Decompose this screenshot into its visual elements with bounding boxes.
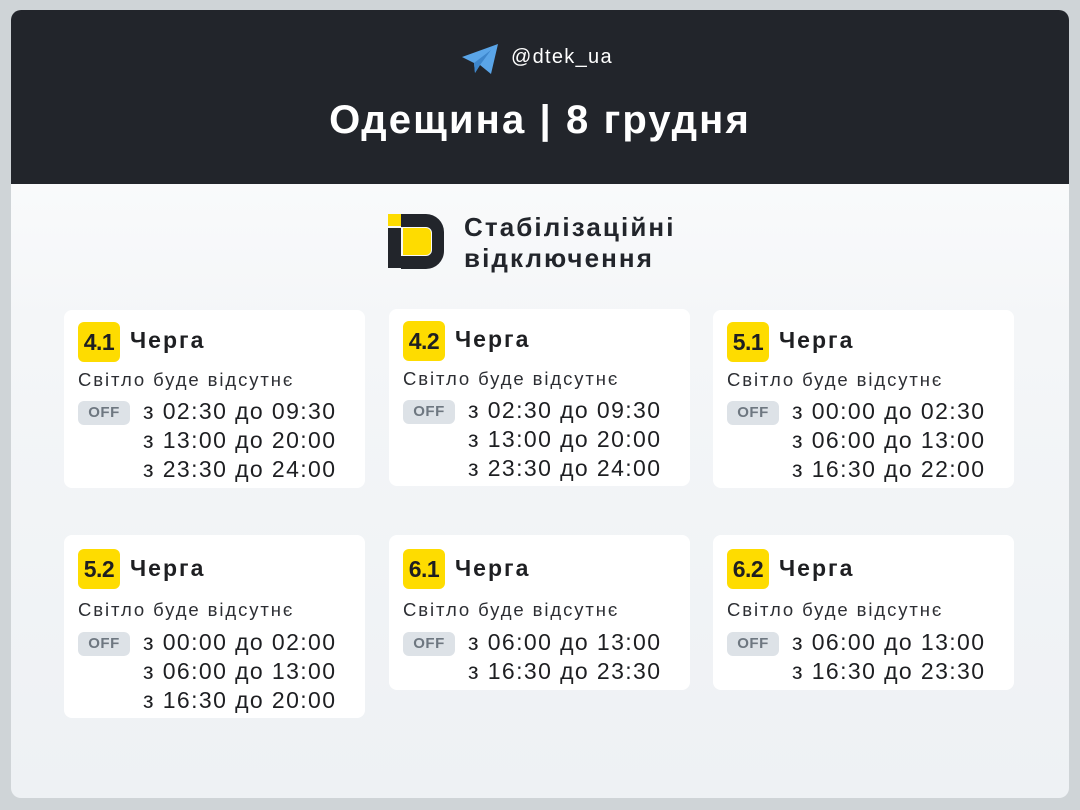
card: 6.2: OFF bbox=[737, 635, 769, 652]
card: 4.2: з 02:30 до 09:30 bbox=[468, 397, 661, 423]
card: 5.1: Світло буде відсутнє bbox=[727, 369, 943, 390]
header bbox=[11, 10, 1069, 184]
badge 6.1: 6.1 bbox=[409, 556, 439, 582]
card: 5.2: з 00:00 до 02:00 bbox=[143, 629, 336, 655]
card: 6.1: Черга bbox=[455, 555, 530, 581]
card: 5.1: з 16:30 до 22:00 bbox=[792, 456, 985, 482]
card: 5.1 bbox=[713, 310, 1014, 488]
card: 5.1: Черга bbox=[779, 327, 854, 353]
card: 6.1 bbox=[389, 535, 690, 690]
card: 4.1: Черга bbox=[130, 327, 205, 353]
telegram handle: @dtek_ua bbox=[511, 46, 613, 68]
card: 4.1: з 23:30 до 24:00 bbox=[143, 456, 336, 482]
card: 5.2: Світло буде відсутнє bbox=[78, 599, 294, 620]
logo bbox=[388, 214, 444, 269]
badge 5.1: 5.1 bbox=[733, 329, 763, 355]
badge 6.1 bbox=[403, 549, 445, 589]
badge 4.2: 4.2 bbox=[409, 328, 439, 354]
card: 6.2 bbox=[713, 535, 1014, 690]
card: 4.1: з 13:00 до 20:00 bbox=[143, 427, 336, 453]
card: 5.2: Черга bbox=[130, 555, 205, 581]
badge 4.1 bbox=[78, 322, 120, 362]
card: 5.2 bbox=[64, 535, 365, 718]
badge 4.1: 4.1 bbox=[84, 329, 114, 355]
card: 4.1: з 02:30 до 09:30 bbox=[143, 398, 336, 424]
card: 6.2: з 16:30 до 23:30 bbox=[792, 658, 985, 684]
card: 6.1: OFF bbox=[413, 635, 445, 652]
card: 5.1: з 06:00 до 13:00 bbox=[792, 427, 985, 453]
card: 4.2: Світло буде відсутнє bbox=[403, 368, 619, 389]
card: 4.2: з 23:30 до 24:00 bbox=[468, 455, 661, 481]
badge 5.2: 5.2 bbox=[84, 556, 114, 582]
card: 6.1: з 06:00 до 13:00 bbox=[468, 629, 661, 655]
card: 5.2: OFF bbox=[88, 635, 120, 652]
card: 5.1: з 00:00 до 02:30 bbox=[792, 398, 985, 424]
card: 6.2: з 06:00 до 13:00 bbox=[792, 629, 985, 655]
card: 6.2: Черга bbox=[779, 555, 854, 581]
card: 4.1: OFF bbox=[88, 404, 120, 421]
card: 6.1: Світло буде відсутнє bbox=[403, 599, 619, 620]
card: 4.2: з 13:00 до 20:00 bbox=[468, 426, 661, 452]
card: 6.1: з 16:30 до 23:30 bbox=[468, 658, 661, 684]
subtitle heading: відключення bbox=[464, 243, 654, 273]
card: 5.1: OFF bbox=[737, 404, 769, 421]
badge 5.1 bbox=[727, 322, 769, 362]
badge 6.2 bbox=[727, 549, 769, 589]
subtitle heading: Стабілізаційні bbox=[464, 212, 676, 242]
badge 6.2: 6.2 bbox=[733, 556, 763, 582]
card: 4.2: OFF bbox=[413, 403, 445, 420]
subtitle heading bbox=[464, 212, 676, 273]
badge 5.2 bbox=[78, 549, 120, 589]
badge 4.2 bbox=[403, 321, 445, 361]
card: 4.2: Черга bbox=[455, 326, 530, 352]
card: 4.2 bbox=[389, 309, 690, 486]
title: Одещина | 8 грудня bbox=[329, 98, 751, 142]
card: 4.1 bbox=[64, 310, 365, 488]
icon: telegram bbox=[462, 44, 498, 74]
card: 5.2: з 06:00 до 13:00 bbox=[143, 658, 336, 684]
card: 4.1: Світло буде відсутнє bbox=[78, 369, 294, 390]
card: 5.2: з 16:30 до 20:00 bbox=[143, 687, 336, 713]
card: 6.2: Світло буде відсутнє bbox=[727, 599, 943, 620]
